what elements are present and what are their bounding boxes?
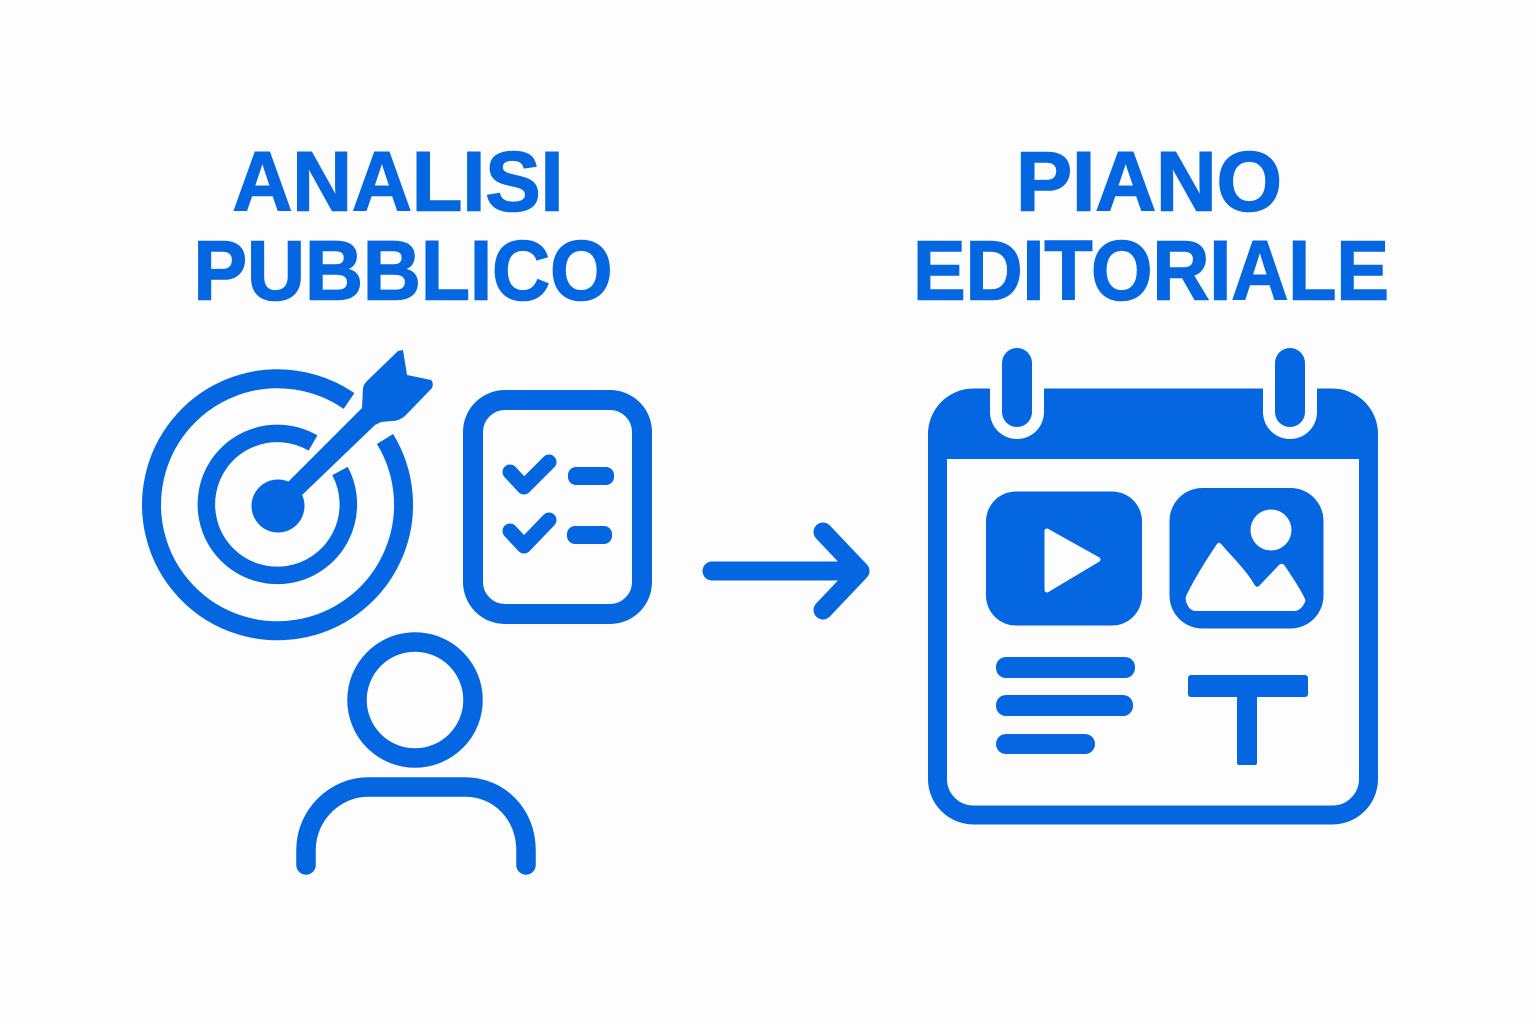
video tile [986, 492, 1142, 626]
heading: analisi pubblico: ANALISI [232, 134, 564, 228]
calendar header [928, 389, 1378, 459]
arrow [712, 532, 860, 610]
heading: analisi pubblico [194, 134, 612, 318]
inner ring [206, 433, 348, 575]
icon: person [306, 642, 526, 865]
heading: analisi pubblico: PUBBLICO [194, 224, 612, 318]
calendar ring left [990, 348, 1044, 439]
bullseye [252, 480, 304, 532]
icon: target with arrow [152, 350, 433, 631]
letter T icon [1188, 675, 1308, 765]
heading: piano editoriale: EDITORIALE [913, 224, 1389, 318]
heading: piano editoriale [913, 134, 1389, 318]
icon: calendar [928, 348, 1378, 815]
dart [288, 350, 433, 497]
heading: piano editoriale: PIANO [1016, 134, 1282, 228]
outer ring [152, 379, 404, 631]
image tile [1170, 488, 1324, 628]
icon: checklist [473, 400, 642, 614]
calendar frame [938, 398, 1368, 815]
calendar ring right [1263, 348, 1317, 439]
text lines [996, 657, 1135, 754]
